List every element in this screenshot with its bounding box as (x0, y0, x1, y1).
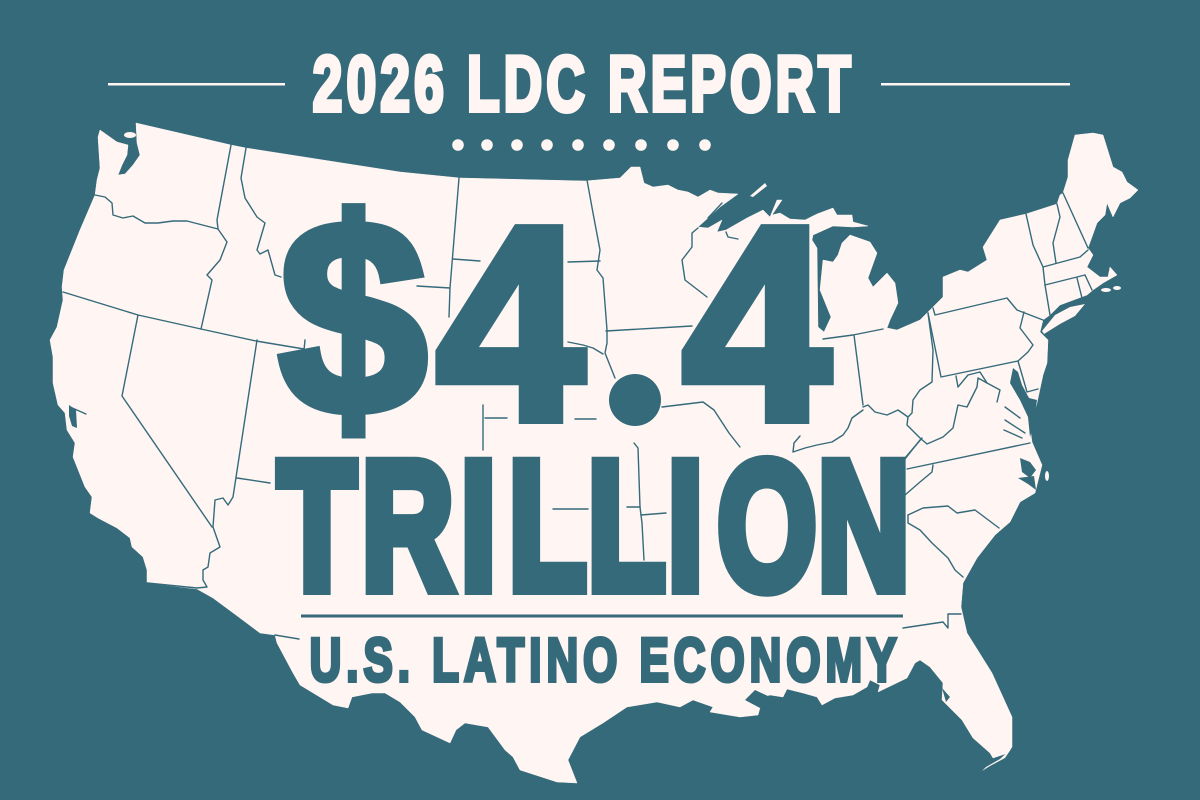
rule under headline (301, 614, 903, 618)
headline unit: N (818, 425, 910, 628)
headline figure: $ (279, 164, 427, 472)
headline unit: L (588, 425, 665, 628)
headline figure: 4 (436, 170, 586, 478)
map: state borders (63, 145, 1092, 639)
headline unit: R (362, 425, 454, 628)
decorative rule left (108, 83, 285, 86)
map: islands (124, 132, 1121, 771)
headline figure (279, 164, 832, 478)
title: 2026 LDC REPORT (313, 42, 851, 128)
decorative rule right (881, 83, 1070, 86)
subtitle: U.S. LATINO ECONOMY (310, 627, 896, 695)
headline figure: . (617, 297, 652, 442)
headline unit: L (509, 425, 587, 628)
map: bays and inlets (69, 368, 1037, 708)
headline unit: I (461, 425, 496, 628)
map: land silhouette (50, 123, 1138, 783)
headline unit: T (278, 425, 356, 628)
headline unit: O (717, 425, 817, 628)
map of the United States (50, 123, 1138, 783)
headline unit: I (668, 425, 703, 628)
dotted divider (452, 139, 711, 151)
headline figure: 4 (682, 170, 832, 478)
